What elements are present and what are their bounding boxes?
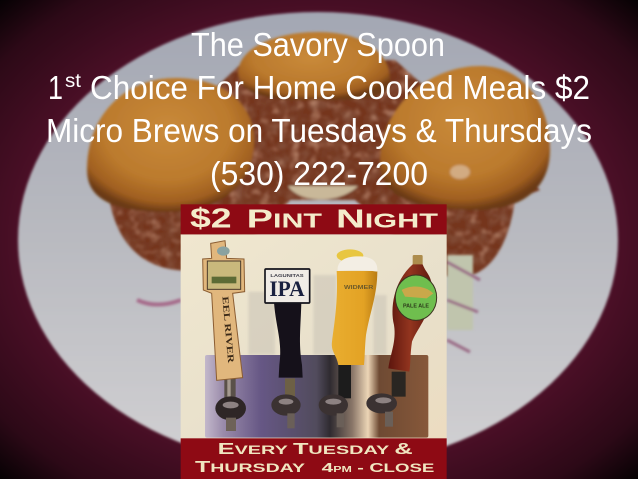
line 1: The Savory Spoon: [191, 26, 445, 63]
tap shadows: [248, 275, 387, 355]
pulled pork sliders photo: [87, 32, 550, 295]
garnish beside poster: [137, 255, 480, 352]
line 2: st: [65, 71, 82, 92]
poster wall: [181, 234, 447, 439]
banner word: Night: NIGHT: [336, 203, 438, 233]
black handle: [274, 302, 303, 378]
wooden handle: [203, 241, 245, 380]
beer glass: [332, 271, 377, 365]
tap 1: Eel River: [203, 241, 246, 431]
line 2: Choice For Home Cooked Meals $2: [90, 69, 590, 106]
right bun: [380, 66, 550, 210]
steel back plate: [205, 355, 428, 438]
line 3: Micro Brews on Tuesdays & Thursdays: [46, 112, 592, 149]
tap 4: pale ale: PALE ALE: [403, 304, 429, 310]
tap 2: IPA: LAGUNITAS: [270, 273, 304, 279]
banner word: $2: $2: [190, 202, 232, 233]
banner line 1: EVERY TUESDAY &: [218, 441, 413, 458]
banner word: Pint: PINT: [247, 203, 322, 233]
brass cap: [413, 255, 423, 265]
title text: [46, 26, 592, 192]
faucet 1: [215, 378, 246, 431]
meat filling: [108, 58, 541, 278]
glass label: WIDMER: [344, 285, 373, 291]
handle label: EEL RIVER: [220, 296, 236, 364]
bottom banner: [181, 438, 447, 479]
bun highlight: [450, 165, 470, 179]
banner line 2: time: 4PM - C LOSE: [322, 460, 434, 475]
top banner: [181, 202, 447, 234]
tap 2: IPA: [265, 269, 310, 428]
faucet 3: [319, 365, 351, 427]
poster: $2 pint night: [181, 202, 447, 479]
tap 3: Widmer: [319, 249, 377, 427]
center bun: [238, 32, 390, 100]
left bun: [87, 78, 254, 212]
faucet 4: [366, 372, 406, 427]
line 4: (530) 222-7200: [210, 155, 428, 192]
lemon: [337, 249, 363, 262]
line 2: 1: [48, 69, 63, 106]
tap 2: IPA: IPA: [269, 276, 305, 301]
red handle: [388, 264, 432, 372]
IPA label: [265, 269, 310, 303]
foam: [338, 256, 377, 272]
faucet 2: [271, 378, 301, 428]
tap 4: pale ale: [366, 255, 437, 427]
banner line 2: day: THURSDAY: [195, 459, 305, 476]
white bread under center bun: [288, 186, 358, 200]
round green badge: [395, 275, 437, 320]
